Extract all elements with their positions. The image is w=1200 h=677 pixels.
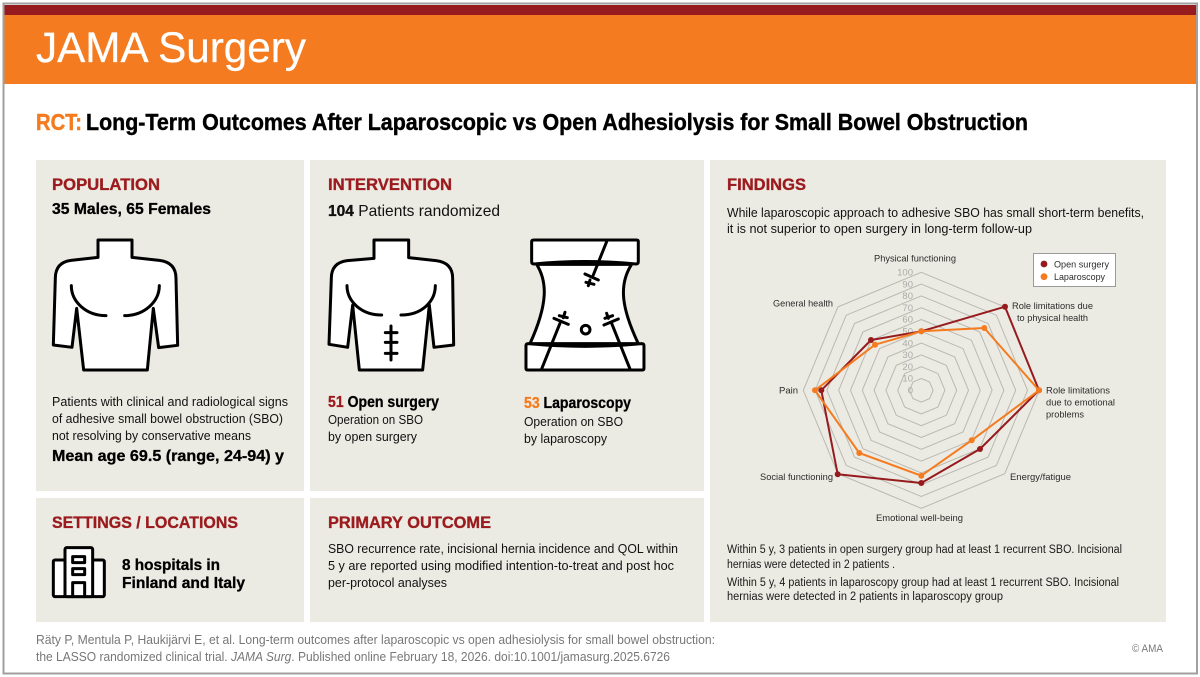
axis labels: to physical health xyxy=(1017,313,1088,324)
panel: settings xyxy=(36,498,304,622)
findings summary: it is not superior to open surgery in long-term follow-up xyxy=(727,221,1032,236)
icon: abdomen with laparoscopic ports xyxy=(526,240,644,370)
citation: the LASSO randomized clinical trial. JAMA Surg. Published online February 18, 2026. doi:10.1001/jamasurg.2025.6726 xyxy=(36,650,670,664)
primary outcome heading: PRIMARY OUTCOME xyxy=(328,514,491,532)
axis labels: problems xyxy=(1046,410,1084,420)
axis labels: Physical functioning xyxy=(874,254,956,264)
primary outcome text: 5 y are reported using modified intention-to-treat and post hoc xyxy=(328,558,675,573)
primary outcome text xyxy=(328,541,678,590)
population description: not resolving by conservative means xyxy=(52,428,251,443)
randomized count: 104 Patients randomized xyxy=(328,203,500,220)
icon: hospital xyxy=(53,548,104,597)
axis scale xyxy=(897,268,913,396)
findings results text: hernias were detected in 2 patients . xyxy=(727,559,895,571)
title: RCT: xyxy=(36,109,82,135)
axis scale: 70 xyxy=(902,303,913,314)
panel: intervention xyxy=(310,160,704,491)
findings summary xyxy=(727,205,1144,236)
settings heading: SETTINGS / LOCATIONS xyxy=(52,514,238,532)
population heading: POPULATION xyxy=(52,176,160,194)
axis labels: Social functioning xyxy=(760,472,833,483)
axis scale: 20 xyxy=(902,362,913,373)
open surgery arm: by open surgery xyxy=(328,429,418,444)
title: Long-Term Outcomes After Laparoscopic vs Open Adhesiolysis for Small Bowel Obstruction xyxy=(86,109,1028,135)
copyright: © AMA xyxy=(1132,643,1164,655)
primary outcome text: per-protocol analyses xyxy=(328,575,447,590)
axis labels: Pain xyxy=(779,386,798,396)
radar chart xyxy=(760,254,1116,524)
population description: of adhesive small bowel obstruction (SBO) xyxy=(52,411,283,426)
axis scale: 90 xyxy=(902,279,913,290)
findings results text xyxy=(727,544,1122,603)
axis scale: 60 xyxy=(902,315,913,326)
findings results text: Within 5 y, 4 patients in laparoscopy group had at least 1 recurrent SBO. Incisional xyxy=(727,577,1119,589)
citation: Räty P, Mentula P, Haukijärvi E, et al. Long-term outcomes after laparoscopic vs open adhesiolysis for small bowel obstruction: xyxy=(36,633,715,647)
panel: findings xyxy=(710,160,1166,622)
settings text: Finland and Italy xyxy=(122,575,245,592)
primary outcome text: SBO recurrence rate, incisional hernia incidence and QOL within xyxy=(328,541,678,556)
axis scale: 40 xyxy=(902,338,913,349)
findings results text: hernias were detected in 2 patients in laparoscopy group xyxy=(727,591,1003,603)
axis labels: Role limitations due xyxy=(1012,301,1093,312)
laparoscopy arm: Operation on SBO xyxy=(524,414,623,429)
header band xyxy=(4,5,1196,84)
axis labels: Emotional well-being xyxy=(876,513,963,524)
settings text: 8 hospitals in xyxy=(122,557,220,574)
axis scale: 50 xyxy=(902,326,913,338)
open surgery arm: Operation on SBO xyxy=(328,412,423,427)
findings results text: Within 5 y, 3 patients in open surgery group had at least 1 recurrent SBO. Incisional xyxy=(727,544,1122,556)
axis scale: 10 xyxy=(902,374,913,385)
axis labels: Energy/fatigue xyxy=(1010,472,1071,483)
laparoscopy series xyxy=(812,325,1042,479)
open surgery arm xyxy=(328,394,439,444)
mean age: Mean age 69.5 (range, 24-94) y xyxy=(52,448,284,465)
panel: population xyxy=(36,160,304,491)
axis labels xyxy=(760,254,1115,524)
legend: Laparoscopy xyxy=(1054,272,1105,283)
findings heading: FINDINGS xyxy=(727,176,806,194)
population description: Patients with clinical and radiological signs xyxy=(52,394,288,409)
axis scale: 100 xyxy=(897,268,913,278)
laparoscopy arm: 53 Laparoscopy xyxy=(524,395,631,412)
axis labels: General health xyxy=(773,298,833,310)
axis scale: 0 xyxy=(908,386,913,396)
laparoscopy arm xyxy=(524,395,631,446)
intervention heading: INTERVENTION xyxy=(328,176,452,194)
legend xyxy=(1034,254,1116,286)
journal name: JAMA Surgery xyxy=(36,24,306,72)
findings summary: While laparoscopic approach to adhesive SBO has small short-term benefits, xyxy=(727,205,1144,220)
open surgery series xyxy=(818,304,1042,486)
axis labels: due to emotional xyxy=(1046,398,1115,408)
axis scale: 80 xyxy=(902,291,913,302)
settings text xyxy=(122,557,245,592)
axis labels: Role limitations xyxy=(1046,386,1110,396)
population description xyxy=(52,394,288,443)
population counts: 35 Males, 65 Females xyxy=(52,201,211,218)
laparoscopy arm: by laparoscopy xyxy=(524,431,608,446)
open surgery arm: 51 Open surgery xyxy=(328,394,439,411)
axis scale: 30 xyxy=(902,350,913,361)
citation xyxy=(36,633,715,664)
panel: primary outcome xyxy=(310,498,704,622)
icon: torso xyxy=(53,240,178,370)
icon: torso with midline incision xyxy=(329,240,454,370)
legend: Open surgery xyxy=(1054,260,1109,270)
